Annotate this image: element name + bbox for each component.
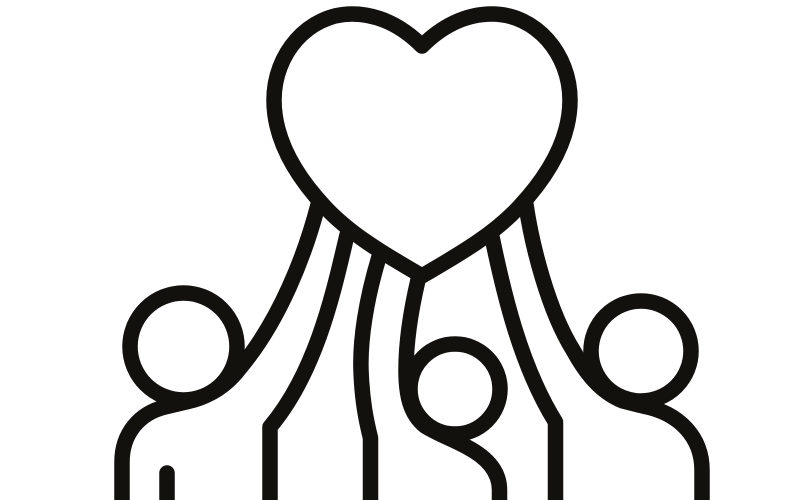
- second adult arm: [361, 257, 379, 500]
- left adult body and raised arm: [122, 205, 347, 500]
- right adult body and raised arm: [492, 205, 702, 500]
- left adult head: [130, 293, 237, 400]
- child arm and body: [406, 280, 500, 500]
- heart: [274, 14, 570, 276]
- right adult head: [591, 301, 691, 401]
- child head: [410, 344, 500, 434]
